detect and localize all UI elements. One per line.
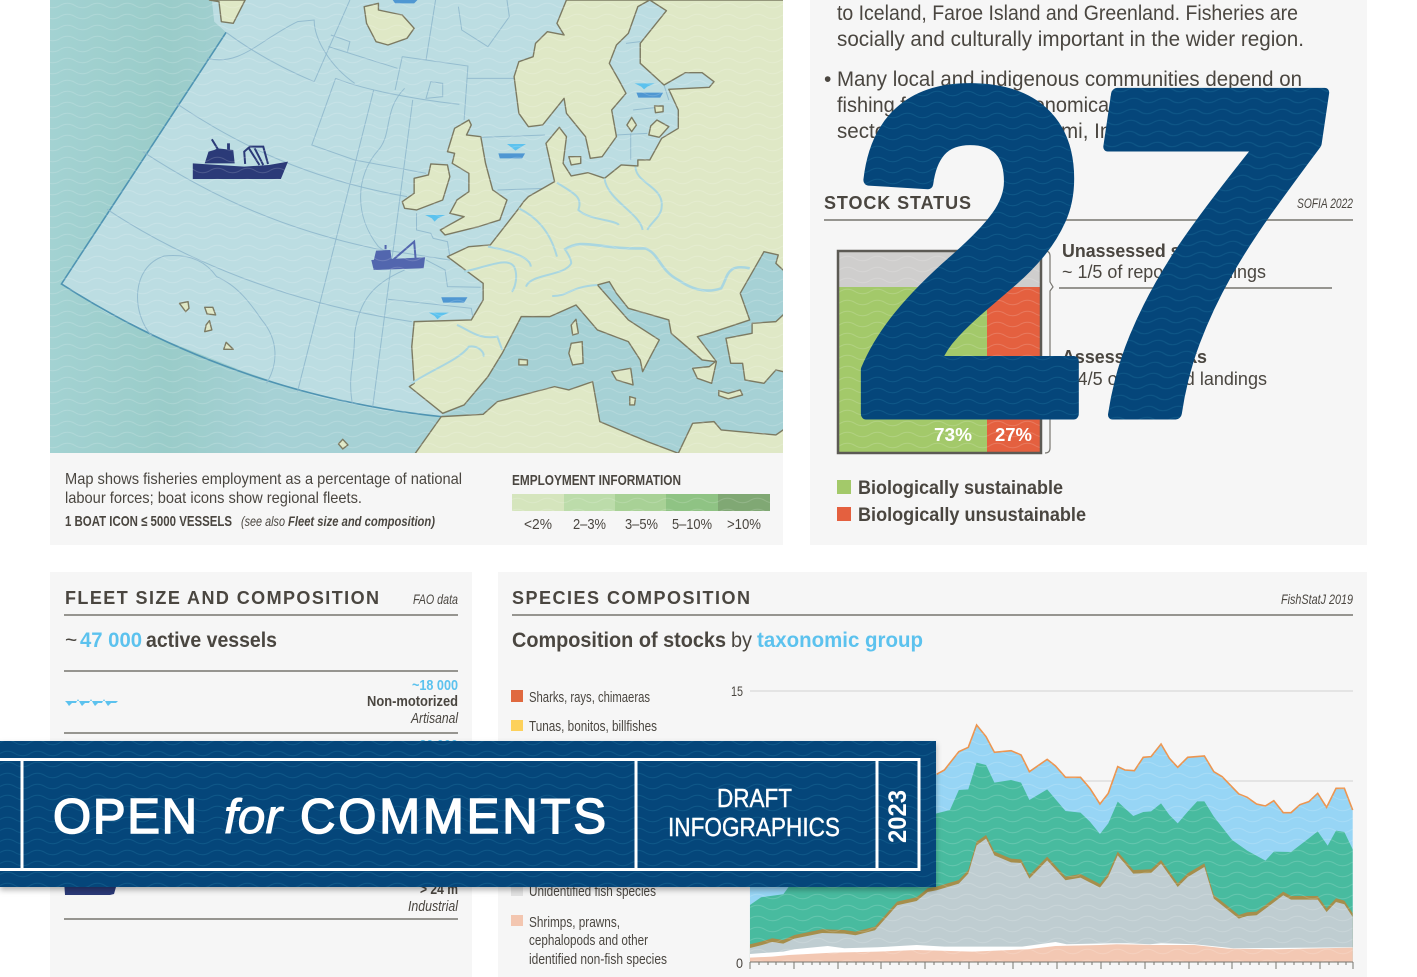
legend: taxonomic groups: identified non-fish species <box>529 951 667 968</box>
subheading: taxonomic group <box>757 629 923 652</box>
heading: species composition: SPECIES COMPOSITION <box>512 588 750 608</box>
caption text <box>65 471 462 530</box>
heading: fleet size <box>64 588 458 615</box>
bracket <box>1045 251 1053 453</box>
caption text: (see also <box>241 513 285 529</box>
panel: map caption <box>50 453 783 545</box>
stock annotations: ~ 1/5 of reported landings <box>1062 262 1266 282</box>
row: industrial: > 24 m <box>420 881 458 898</box>
intro text block: sectors, including the Sami, Inuit <box>837 120 1133 143</box>
row: industrial: Industrial <box>408 898 459 915</box>
caption text: labour forces; boat icons show regional fleets. <box>65 490 362 507</box>
stock annotations: Unassessed stocks <box>1062 241 1227 261</box>
legend: stock status: Biologically sustainable <box>858 478 1063 499</box>
heading: fleet size: FLEET SIZE AND COMPOSITION <box>65 588 379 608</box>
legend: taxonomic groups: Shrimps, prawns, <box>529 914 620 931</box>
heading: fleet size: FAO data <box>413 591 458 607</box>
stacked area chart: 0 <box>736 955 743 971</box>
legend: employment information <box>512 472 770 533</box>
big number 27 <box>851 0 1358 513</box>
banner subtitle: INFOGRAPHICS <box>668 812 840 842</box>
subheading: Composition of stocks <box>512 629 726 652</box>
legend: employment information: <2% <box>524 516 552 533</box>
icons: small fishing boats <box>393 0 663 319</box>
legend: stock status <box>837 478 1086 526</box>
land masses <box>179 0 790 455</box>
legend: employment information: 2–3% <box>573 516 606 533</box>
caption text: Map shows fisheries employment as a percentage of national <box>65 471 462 488</box>
icon: industrial trawler <box>193 139 288 179</box>
intro text block: • <box>824 68 831 91</box>
row: non-motorized <box>64 677 459 733</box>
row: industrial <box>64 737 459 919</box>
legend: employment information: >10% <box>727 516 761 533</box>
x axis <box>731 962 1360 977</box>
fishing area boundaries <box>107 0 669 407</box>
banner subtitle: DRAFT <box>717 783 792 813</box>
stacked area chart: 15 <box>731 683 743 699</box>
rivers <box>412 167 750 383</box>
heading: stock status <box>824 193 1353 220</box>
legend: taxonomic groups: Unidentified fish species <box>529 883 656 900</box>
stacked area chart <box>731 683 1353 971</box>
heading: stock status: SOFIA 2022 <box>1297 195 1353 211</box>
stock annotations: Assessed stocks <box>1062 347 1207 367</box>
banner title <box>53 790 606 844</box>
legend: taxonomic groups <box>511 689 667 968</box>
panel: map <box>50 0 790 455</box>
subheading <box>512 629 923 652</box>
banner title: OPEN <box>53 790 197 844</box>
icon: semi-industrial boat <box>371 242 425 270</box>
caption text: 1 BOAT ICON ≤ 5000 VESSELS <box>65 513 232 530</box>
legend: taxonomic groups: Tunas, bonitos, billfishes <box>529 718 657 735</box>
subheading: by <box>731 629 752 652</box>
panel: fleet size and composition <box>50 572 472 977</box>
stock annotations <box>1059 241 1332 389</box>
banner year: 2023 <box>884 790 912 843</box>
stat: active vessels <box>64 629 458 671</box>
stacked bar chart: 27% <box>995 425 1032 445</box>
intro text block <box>824 2 1304 143</box>
panel: stock status and text <box>810 0 1367 545</box>
row: non-motorized: Non-motorized <box>367 693 458 710</box>
legend: employment information: 5–10% <box>672 516 712 533</box>
panel: species composition <box>498 572 1367 977</box>
big number 27: 2 <box>851 0 1091 513</box>
intro text block: fishing for food and economically <box>837 94 1128 117</box>
banner title: for <box>224 791 284 844</box>
row: non-motorized: ~18 000 <box>412 677 458 694</box>
heading: stock status: STOCK STATUS <box>824 193 971 213</box>
legend: taxonomic groups: cephalopods and other <box>529 932 648 949</box>
big number 27: 7 <box>1035 0 1358 513</box>
banner title: COMMENTS <box>300 790 606 844</box>
legend: employment information: 3–5% <box>625 516 658 533</box>
row: non-motorized: Artisanal <box>410 710 459 727</box>
map geography <box>61 0 790 455</box>
intro text block: Many local and indigenous communities depend on <box>837 68 1302 91</box>
intro text block: to Iceland, Faroe Island and Greenland. Fisheries are <box>837 2 1298 25</box>
banner subtitle <box>668 783 840 842</box>
stacked bar chart <box>838 251 1041 453</box>
stat: active vessels: active vessels <box>146 629 277 652</box>
stat: active vessels: 47 000 <box>80 629 142 652</box>
icon: industrial vessel hull <box>64 880 118 895</box>
legend: stock status: Biologically unsustainable <box>858 505 1086 526</box>
heading: species composition: FishStatJ 2019 <box>1281 591 1353 607</box>
heading: species composition <box>512 588 1353 615</box>
stock annotations: ~ 4/5 of reported landings <box>1062 369 1267 389</box>
icon: row of small boats <box>65 699 118 706</box>
stacked bar chart: 73% <box>934 425 972 445</box>
intro text block: socially and culturally important in the wider region. <box>837 28 1304 51</box>
row: industrial: ~20 000 <box>412 737 458 754</box>
stat: active vessels: ~ <box>65 629 77 652</box>
legend: employment information: EMPLOYMENT INFORMATION <box>512 472 681 489</box>
banner: open for comments <box>0 741 936 887</box>
legend: taxonomic groups: Sharks, rays, chimaeras <box>529 689 650 706</box>
caption text: Fleet size and composition) <box>288 513 435 529</box>
